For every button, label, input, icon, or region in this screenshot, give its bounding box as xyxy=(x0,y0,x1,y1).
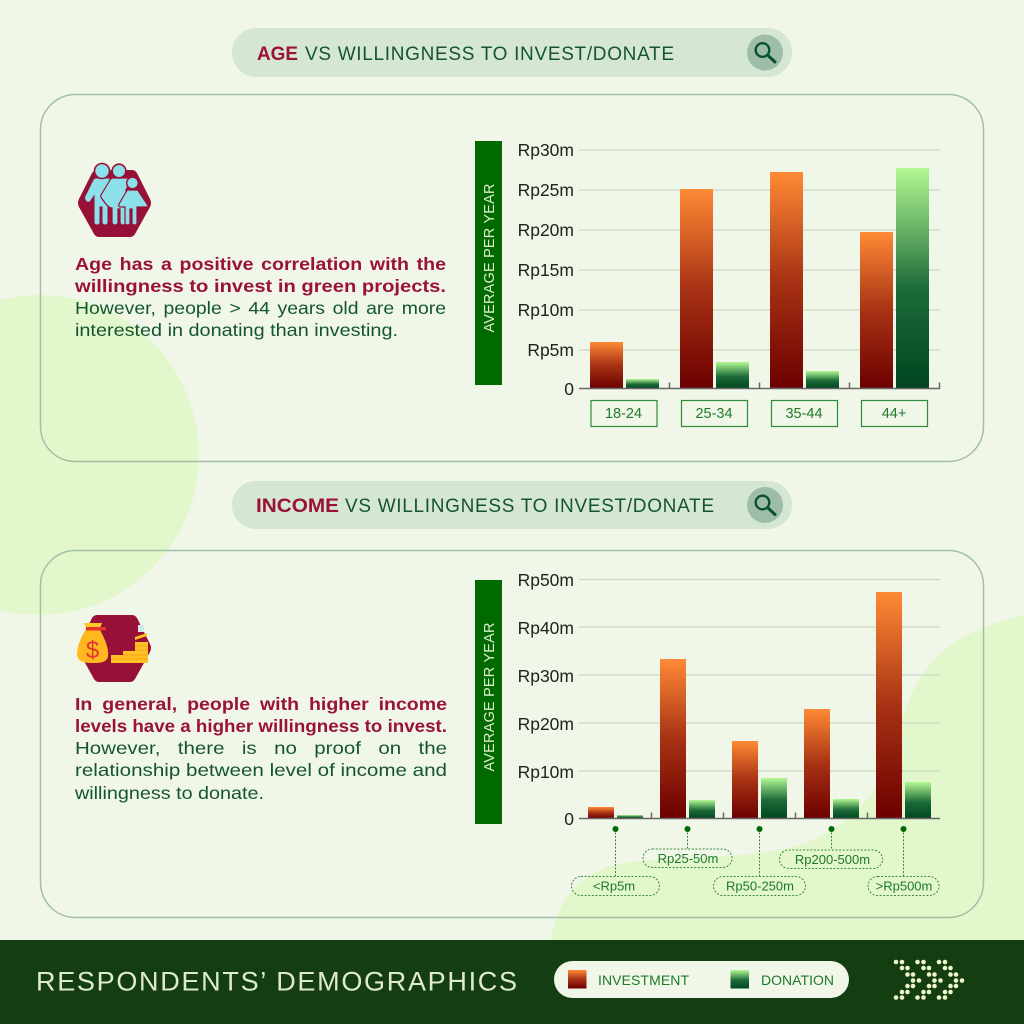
bar chart: income xyxy=(518,570,940,896)
category labels: 44+ xyxy=(882,406,906,422)
y axis labels: Rp10m xyxy=(518,762,574,782)
legend item: investment: INVESTMENT xyxy=(598,972,689,988)
text block: income finding: willingness to donate. xyxy=(74,783,264,803)
y axis labels: Rp30m xyxy=(518,666,574,686)
y axis labels: Rp10m xyxy=(518,300,574,320)
text block: age finding: Age has a positive correlation with the xyxy=(75,254,446,274)
heading accent: income: INCOME xyxy=(256,496,339,517)
donation bars xyxy=(617,778,931,818)
callout labels xyxy=(572,849,939,896)
y axis labels: Rp40m xyxy=(518,618,574,638)
axis title: income chart: AVERAGE PER YEAR xyxy=(482,622,498,772)
category labels: 25-34 xyxy=(695,406,733,422)
callout labels: Rp200-500m xyxy=(795,852,870,867)
investment bars xyxy=(588,592,902,818)
axis title: income chart xyxy=(475,580,502,824)
donation bars xyxy=(626,168,929,388)
icon: money bag and coins on crimson hexagon: $ xyxy=(86,637,99,664)
y axis labels: 0 xyxy=(564,809,574,829)
category labels: 18-24 xyxy=(605,406,642,422)
axis title: age chart xyxy=(475,141,502,385)
callout labels: >Rp500m xyxy=(876,878,932,894)
y axis labels: Rp30m xyxy=(518,140,574,160)
text block: income finding: However, there is no proof on the xyxy=(75,738,447,758)
y axis labels: Rp20m xyxy=(518,714,574,734)
y axis labels xyxy=(518,570,574,829)
text block: income finding xyxy=(74,694,447,803)
heading text: income: VS WILLINGNESS TO INVEST/DONATE xyxy=(345,496,714,517)
icon: dotted chevrons xyxy=(894,960,964,1000)
text block: income finding: In general, people with higher income xyxy=(75,694,447,714)
category labels: 35-44 xyxy=(785,406,823,422)
legend item: investment xyxy=(568,970,689,988)
axis title: age chart: AVERAGE PER YEAR xyxy=(482,184,498,332)
text block: age finding: However, people > 44 years old are more xyxy=(75,298,446,318)
callout labels: Rp25-50m xyxy=(658,851,718,866)
callout labels: <Rp5m xyxy=(593,878,635,894)
heading pill: income xyxy=(232,481,792,529)
text block: income finding: relationship between level of income and xyxy=(75,760,447,780)
y axis labels xyxy=(518,140,574,399)
heading pill: age xyxy=(232,28,792,77)
y axis labels: Rp20m xyxy=(518,220,574,240)
footer bar xyxy=(0,940,1024,1024)
text block: age finding: willingness to invest in green projects. xyxy=(74,276,446,296)
legend xyxy=(554,961,849,998)
legend item: donation xyxy=(730,970,834,988)
callout labels: Rp50-250m xyxy=(726,878,794,894)
icon: magnifier xyxy=(747,487,783,523)
icon: magnifier xyxy=(747,34,783,70)
text block: age finding: interested in donating than investing. xyxy=(75,320,398,340)
icon: money bag and coins on crimson hexagon xyxy=(77,615,151,682)
callout connectors xyxy=(612,826,906,876)
panel: income xyxy=(40,550,984,918)
background circle: left xyxy=(0,295,199,615)
y axis labels: Rp50m xyxy=(518,570,574,590)
category labels xyxy=(591,400,928,426)
y axis labels: 0 xyxy=(564,379,574,399)
legend item: donation: DONATION xyxy=(761,972,834,988)
text block: income finding: levels have a higher willingness to invest. xyxy=(75,716,447,736)
y axis labels: Rp15m xyxy=(518,260,574,280)
icon: family on crimson hexagon xyxy=(78,164,151,237)
text block: age finding xyxy=(74,254,446,340)
heading accent: age: AGE xyxy=(257,44,298,65)
bar chart: age xyxy=(518,140,940,426)
panel: age xyxy=(40,94,984,462)
y axis labels: Rp5m xyxy=(527,340,574,360)
footer title: RESPONDENTS’ DEMOGRAPHICS xyxy=(36,966,517,996)
background blob: right xyxy=(551,615,1024,940)
heading text: age: VS WILLINGNESS TO INVEST/DONATE xyxy=(305,44,674,65)
y axis labels: Rp25m xyxy=(518,180,574,200)
investment bars xyxy=(590,172,893,388)
